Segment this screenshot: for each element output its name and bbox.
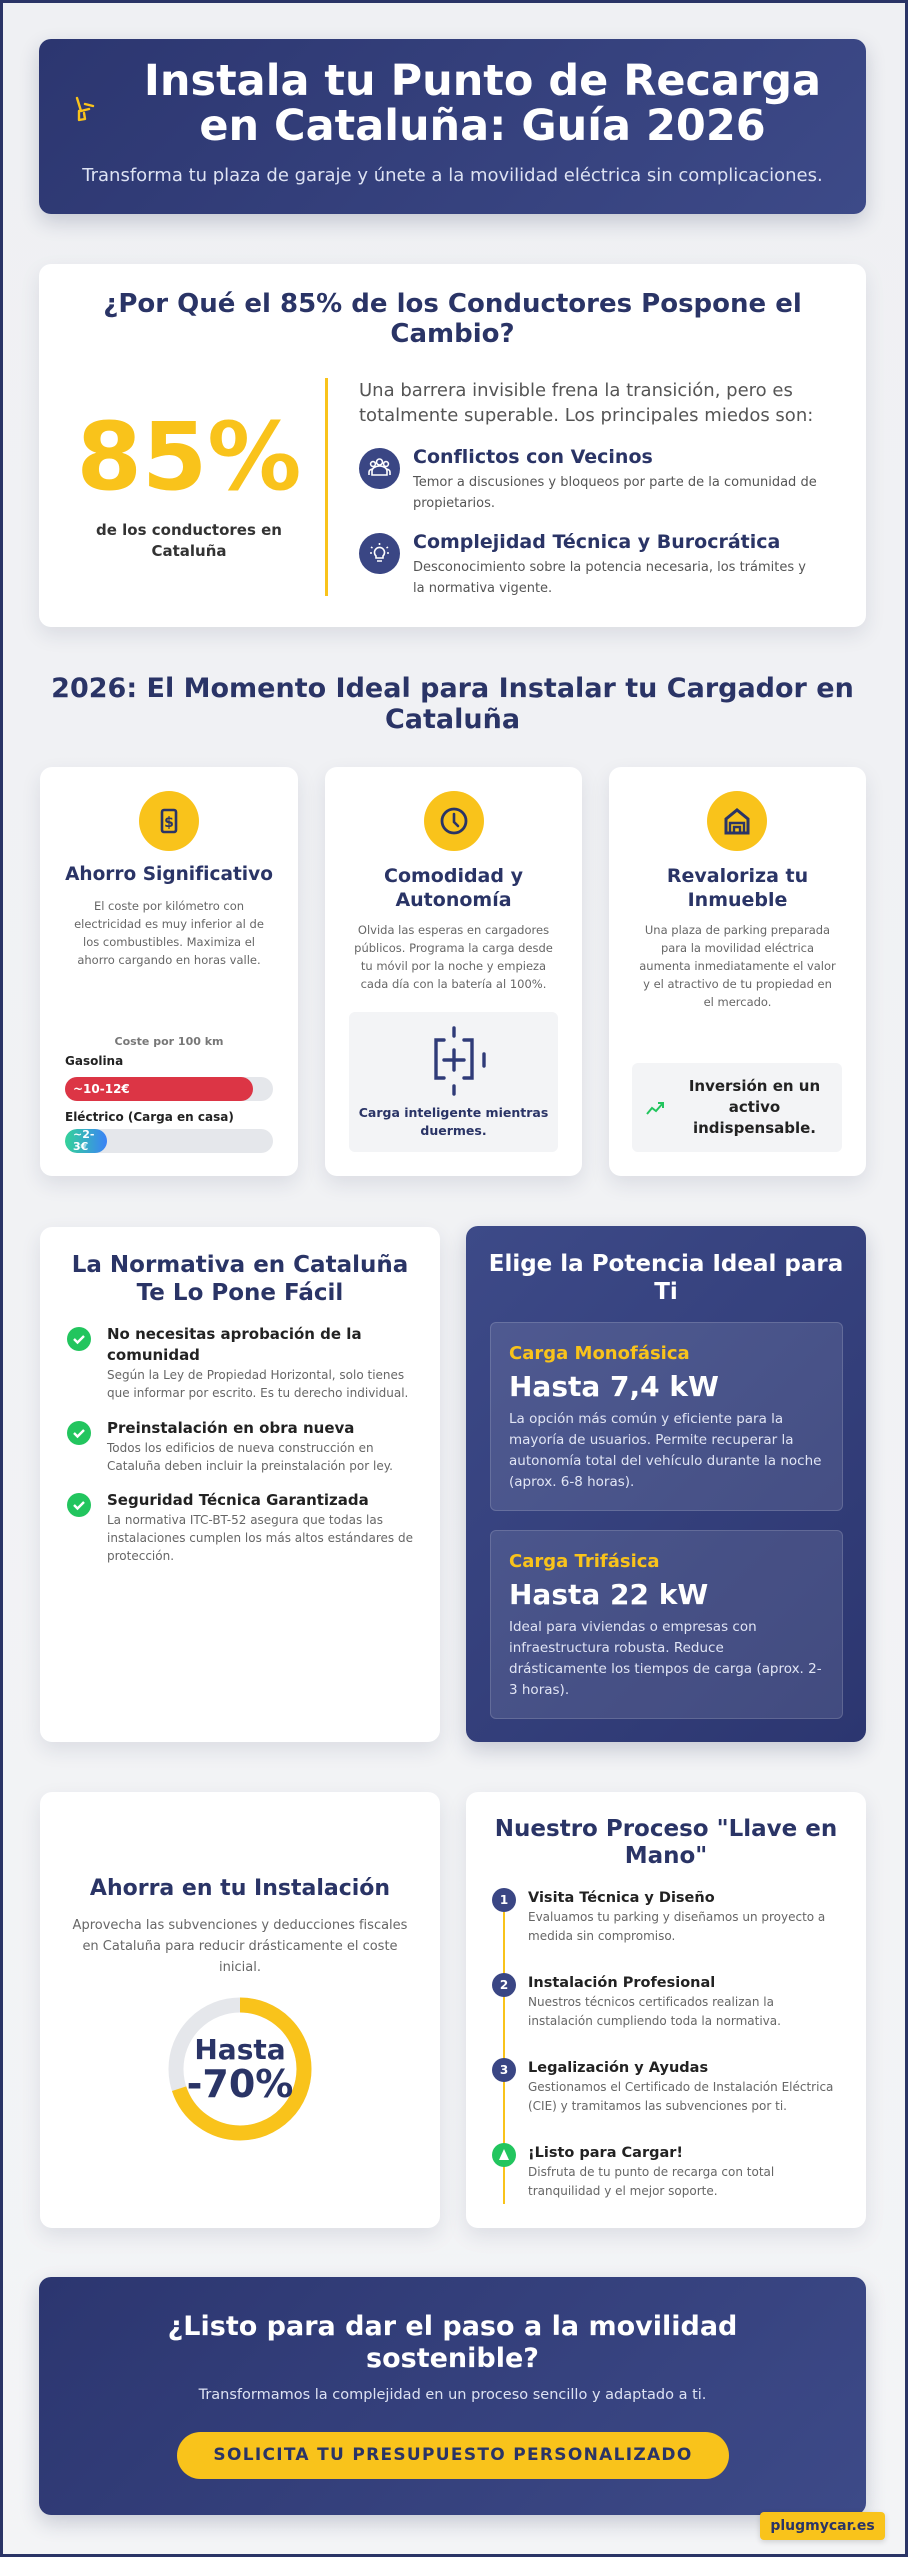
timeline xyxy=(492,1888,833,2204)
heading xyxy=(489,1251,843,1305)
heading: Mano" xyxy=(625,1843,707,1869)
intro text: Una barrera invisible frena la transición, pero es totalmente superable. Los principales miedos son: xyxy=(359,380,813,426)
heading: Nuestro Proceso "Llave en xyxy=(495,1816,837,1842)
item: complejidad tecnica xyxy=(359,531,806,596)
callout: inversion xyxy=(632,1063,842,1152)
step 3: Legalización y Ayudas xyxy=(528,2060,708,2076)
callout: carga inteligente: duermes. xyxy=(420,1123,487,1138)
description: aumenta inmediatamente el valor xyxy=(639,959,836,973)
item: no aprobacion: comunidad xyxy=(107,1346,200,1364)
option: monofasica: mayoría de usuarios. Permite recuperar la xyxy=(509,1432,793,1448)
description: inicial. xyxy=(219,1960,261,1975)
stat 85% xyxy=(76,403,302,560)
item: conflictos con vecinos: Temor a discusiones y bloqueos por parte de la comunidad de xyxy=(413,475,817,490)
step 3 xyxy=(492,2058,833,2113)
step 1: 1 xyxy=(500,1893,508,1907)
item: conflictos con vecinos: Conflictos con Vecinos xyxy=(413,446,653,468)
description xyxy=(354,923,553,991)
option: monofasica: Carga Monofásica xyxy=(509,1343,690,1364)
step 1: medida sin compromiso. xyxy=(528,1929,675,1943)
title xyxy=(384,865,523,911)
callout: inversion: indispensable. xyxy=(693,1119,816,1137)
icon: money: $ xyxy=(164,815,174,831)
description xyxy=(639,923,836,1009)
step 3: (CIE) y tramitamos las subvenciones por ti. xyxy=(528,2099,787,2113)
description: Una plaza de parking preparada xyxy=(645,923,830,937)
icon: house xyxy=(707,791,767,851)
icon: smart charge xyxy=(434,1026,486,1096)
option: trifasica: Hasta 22 kW xyxy=(509,1578,708,1611)
item: complejidad tecnica: Complejidad Técnica y Burocrática xyxy=(413,531,780,553)
panel: ahorra en instalacion xyxy=(40,1792,440,2228)
option: monofasica: (aprox. 6-8 horas). xyxy=(509,1474,634,1490)
icon: plug xyxy=(76,96,94,122)
step 4: Disfruta de tu punto de recarga con total xyxy=(528,2165,774,2179)
step 1: Evaluamos tu parking y diseñamos un proyecto a xyxy=(528,1910,825,1924)
title: en Cataluña: Guía 2026 xyxy=(199,101,766,151)
callout: carga inteligente xyxy=(349,1012,558,1152)
step 4: ¡Listo para Cargar! xyxy=(528,2145,683,2161)
callout: inversion: activo xyxy=(729,1098,780,1116)
title: Comodidad y xyxy=(384,865,523,887)
bar chart: coste por 100 km xyxy=(65,1035,273,1153)
stat 85%: de los conductores en xyxy=(96,521,282,539)
option: trifasica: Carga Trifásica xyxy=(509,1551,660,1572)
header banner xyxy=(39,39,866,214)
option: trifasica: infraestructura robusta. Reduce xyxy=(509,1640,724,1656)
option: trifasica: 3 horas). xyxy=(509,1682,569,1698)
bar chart: coste por 100 km: Gasolina xyxy=(65,1054,123,1068)
icon: money xyxy=(139,791,199,851)
chart: donut -70%: -70% xyxy=(187,2062,293,2106)
callout: inversion: Inversión en un xyxy=(689,1077,820,1095)
description: en Cataluña para reducir drásticamente el coste xyxy=(82,1939,398,1954)
description: electricidad es muy inferior al de xyxy=(74,917,264,931)
item: seguridad xyxy=(67,1491,413,1563)
option: trifasica xyxy=(490,1530,843,1719)
item: seguridad: Seguridad Técnica Garantizada xyxy=(107,1491,369,1509)
step 1 xyxy=(492,1888,825,1943)
bar chart: coste por 100 km: Eléctrico (Carga en casa) xyxy=(65,1110,234,1124)
step 1: Visita Técnica y Diseño xyxy=(528,1890,715,1906)
option: monofasica xyxy=(490,1322,843,1511)
description: y el atractivo de tu propiedad en xyxy=(643,977,832,991)
heading: ¿Por Qué el 85% de los Conductores Pospone el Cambio? xyxy=(103,289,802,349)
step 3: 3 xyxy=(500,2063,508,2077)
stat 85%: 85% xyxy=(76,403,302,512)
step 4 xyxy=(492,2143,774,2198)
option: trifasica: Ideal para viviendas o empresas con xyxy=(509,1619,757,1635)
heading: Elige la Potencia Ideal para xyxy=(489,1251,843,1277)
item: preinstalacion xyxy=(67,1419,393,1473)
subtitle: Transformamos la complejidad en un proceso sencillo y adaptado a ti. xyxy=(199,2387,706,2403)
item: no aprobacion: No necesitas aprobación de la xyxy=(107,1325,362,1343)
heading: Ti xyxy=(654,1279,678,1305)
icon: people xyxy=(359,448,400,489)
item: no aprobacion: Según la Ley de Propiedad Horizontal, solo tienes xyxy=(107,1368,404,1382)
step 4: tranquilidad y el mejor soporte. xyxy=(528,2184,718,2198)
description: tu móvil por la noche y empieza xyxy=(361,959,546,973)
title: Revaloriza tu xyxy=(667,865,808,887)
item: complejidad tecnica: Desconocimiento sobre la potencia necesaria, los trámites y xyxy=(413,560,806,575)
description: los combustibles. Maximiza el xyxy=(83,935,255,949)
item: no aprobacion: que informar por escrito. Es tu derecho individual. xyxy=(107,1386,408,1400)
description: Olvida las esperas en cargadores xyxy=(358,923,549,937)
bar chart: coste por 100 km: Coste por 100 km xyxy=(114,1035,223,1048)
description: Aprovecha las subvenciones y deducciones fiscales xyxy=(73,1918,407,1933)
heading xyxy=(168,2311,737,2374)
title xyxy=(144,56,821,151)
bar chart: coste por 100 km: 3€ xyxy=(73,1140,88,1153)
step 2 xyxy=(492,1973,781,2028)
badge: plugmycar.es xyxy=(760,2512,885,2540)
option: monofasica: La opción más común y eficiente para la xyxy=(509,1411,783,1427)
description: cada día con la batería al 100%. xyxy=(361,977,546,991)
badge: plugmycar.es: plugmycar.es xyxy=(770,2518,875,2534)
item: seguridad: protección. xyxy=(107,1549,174,1563)
panel: proceso llave en mano xyxy=(466,1792,866,2228)
description: públicos. Programa la carga desde xyxy=(354,941,553,955)
title xyxy=(667,865,808,911)
item: seguridad: La normativa ITC-BT-52 asegura que todas las xyxy=(107,1513,383,1527)
icon: clock xyxy=(424,791,484,851)
panel: normativa xyxy=(40,1227,440,1742)
item: preinstalacion: Cataluña deben incluir la preinstalación por ley. xyxy=(107,1459,393,1473)
title: Instala tu Punto de Recarga xyxy=(144,56,821,106)
heading: ¿Listo para dar el paso a la movilidad xyxy=(168,2311,737,2342)
heading: 2026 momento ideal: 2026: El Momento Ideal para Instalar tu Cargador en Cataluña xyxy=(51,673,854,735)
description: El coste por kilómetro con xyxy=(94,899,244,913)
step 2: 2 xyxy=(500,1978,508,1992)
description xyxy=(72,1918,407,1975)
subtitle: Transforma tu plaza de garaje y únete a la movilidad eléctrica sin complicaciones. xyxy=(82,165,823,186)
option: trifasica: drásticamente los tiempos de carga (aprox. 2- xyxy=(509,1661,822,1677)
item: complejidad tecnica: la normativa vigente. xyxy=(413,581,552,596)
item: conflictos con vecinos: propietarios. xyxy=(413,496,495,511)
description: para la movilidad eléctrica xyxy=(661,941,814,955)
panel: ahorro significativo xyxy=(40,767,298,1176)
panel: call to action xyxy=(39,2277,866,2515)
step 2: Instalación Profesional xyxy=(528,1975,715,1991)
stat 85%: Cataluña xyxy=(151,542,227,560)
heading: Te Lo Pone Fácil xyxy=(137,1280,343,1306)
description: el mercado. xyxy=(704,995,771,1009)
panel: why 85% postpone xyxy=(39,264,866,627)
item: seguridad: instalaciones cumplen los más altos estándares de xyxy=(107,1531,413,1545)
title: Autonomía xyxy=(395,889,512,911)
step 3: Gestionamos el Certificado de Instalación Eléctrica xyxy=(528,2080,833,2094)
item: preinstalacion: Preinstalación en obra nueva xyxy=(107,1419,354,1437)
step 2: Nuestros técnicos certificados realizan la xyxy=(528,1995,774,2009)
description xyxy=(74,899,264,967)
callout: carga inteligente: Carga inteligente mientras xyxy=(359,1105,548,1120)
heading: La Normativa en Cataluña xyxy=(72,1252,408,1278)
heading xyxy=(495,1816,837,1869)
option: monofasica: autonomía total del vehículo durante la noche xyxy=(509,1453,821,1469)
step 2: instalación cumpliendo toda la normativa. xyxy=(528,2014,781,2028)
heading: sostenible? xyxy=(366,2343,539,2374)
title: Inmueble xyxy=(688,889,787,911)
icon: lightbulb xyxy=(359,533,400,574)
heading: Ahorra en tu Instalación xyxy=(90,1876,390,1901)
description: ahorro cargando en horas valle. xyxy=(77,953,261,967)
button: SOLICITA TU PRESUPUESTO PERSONALIZADO xyxy=(213,2445,693,2465)
panel: revaloriza inmueble xyxy=(609,767,866,1176)
panel: potencia xyxy=(466,1226,866,1742)
option: monofasica: Hasta 7,4 kW xyxy=(509,1370,719,1403)
title: Ahorro Significativo xyxy=(65,864,273,885)
item: preinstalacion: Todos los edificios de nueva construcción en xyxy=(107,1441,374,1455)
item: conflictos con vecinos xyxy=(359,446,817,511)
item: no aprobacion xyxy=(67,1325,408,1400)
heading xyxy=(72,1252,408,1306)
chart: donut -70%: Hasta xyxy=(194,2033,286,2066)
chart: donut -70% xyxy=(168,1998,312,2140)
icon: trend arrow xyxy=(646,1102,664,1115)
panel: comodidad y autonomia xyxy=(325,767,582,1176)
button xyxy=(177,2432,729,2479)
bar chart: coste por 100 km: ~10-12€ xyxy=(73,1082,130,1096)
